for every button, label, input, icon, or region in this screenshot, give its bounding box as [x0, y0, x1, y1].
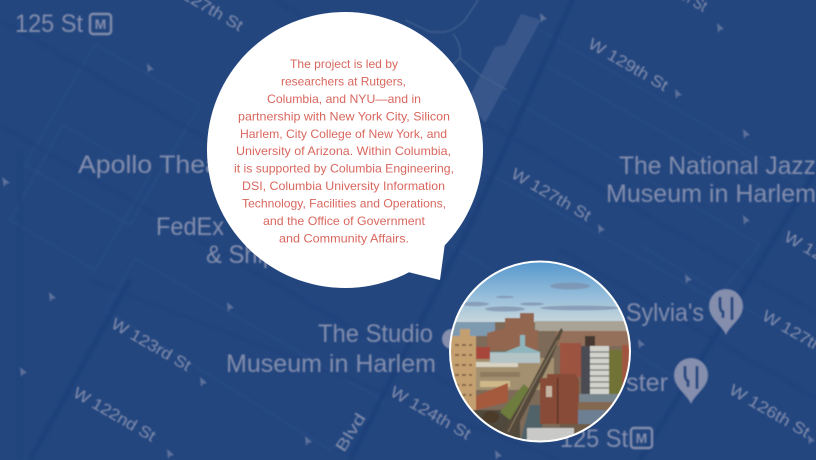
label: Museum in Harlem east: Museum in Harlem — [606, 180, 816, 208]
label: Museum in Harlem: Museum in Harlem — [226, 350, 436, 378]
lower right roofs — [579, 394, 625, 402]
icon: restaurant pin Sylvia's — [709, 289, 743, 335]
photo ring — [450, 262, 630, 442]
label: FedEx: FedEx — [156, 213, 224, 241]
bubble text: and Community Affairs. — [279, 232, 409, 246]
left tan tower — [450, 329, 476, 412]
red brick slab — [560, 343, 581, 377]
label: W 129th St: W 129th St — [585, 36, 671, 95]
elevated rail line — [503, 328, 563, 437]
icon: subway west — [90, 14, 111, 34]
label: W 126th St: W 126th St — [726, 382, 813, 442]
bubble text: The project is led by — [290, 57, 398, 71]
label: W 124th St: W 124th St — [387, 384, 474, 444]
label: The National Jazz: The National Jazz — [619, 152, 816, 180]
bubble text: University of Arizona. Within Columbia, — [236, 144, 451, 158]
label: W 123rd St: W 123rd St — [108, 316, 194, 375]
label: W 127th St centre: W 127th St — [508, 166, 594, 225]
label: The Studio: The Studio — [318, 320, 433, 348]
street below rail — [520, 405, 545, 442]
bubble text: Technology, Facilities and Operations, — [242, 196, 446, 210]
mid low rises — [476, 358, 554, 390]
label: 125 St west: 125 St — [15, 10, 83, 38]
label: W 122nd St: W 122nd St — [70, 385, 159, 446]
distant blocks — [535, 321, 630, 331]
bubble text: researchers at Rutgers, — [281, 74, 406, 88]
icon: subway east: M — [636, 430, 647, 446]
clouds — [461, 282, 620, 312]
icon: restaurant pin south — [674, 358, 708, 404]
right side buildings — [609, 350, 622, 396]
speech bubble — [207, 12, 483, 288]
icon: studio museum pin — [441, 328, 452, 350]
park paths — [405, 0, 507, 90]
bubble text: Harlem, City College of New York, and — [240, 127, 447, 141]
bottom white roof — [527, 428, 574, 444]
bubble text — [234, 57, 454, 246]
park block — [468, 14, 541, 123]
white slab tower — [581, 346, 590, 394]
icon: subway west: M — [95, 16, 106, 32]
icon: subway east — [631, 428, 652, 448]
label: ampersand ship: & Ship — [206, 241, 276, 269]
label: Sylvia's: Sylvia's — [626, 299, 704, 327]
water — [445, 322, 495, 336]
bubble body — [207, 12, 483, 288]
label: ster: ster — [626, 369, 668, 397]
dark brick tower — [540, 374, 579, 424]
bubble tail — [400, 200, 456, 280]
bubble text: Columbia, and NYU—and in — [267, 92, 421, 106]
label: 125 St east: 125 St — [560, 425, 628, 453]
central brown towers — [487, 313, 538, 350]
teal building — [490, 335, 540, 362]
bubble text: and the Office of Government — [263, 214, 426, 228]
label: Apollo Theater: Apollo Theater — [78, 151, 251, 179]
sky — [456, 262, 624, 323]
bubble text: it is supported by Columbia Engineering, — [234, 162, 454, 176]
circular photo of Harlem — [445, 258, 635, 447]
skyline ground — [475, 322, 623, 438]
bubble text: partnership with New York City, Silicon — [238, 110, 450, 124]
bubble text: DSI, Columbia University Information — [242, 179, 445, 193]
label: Blvd: Blvd — [333, 410, 370, 455]
lower left brick — [476, 383, 508, 410]
